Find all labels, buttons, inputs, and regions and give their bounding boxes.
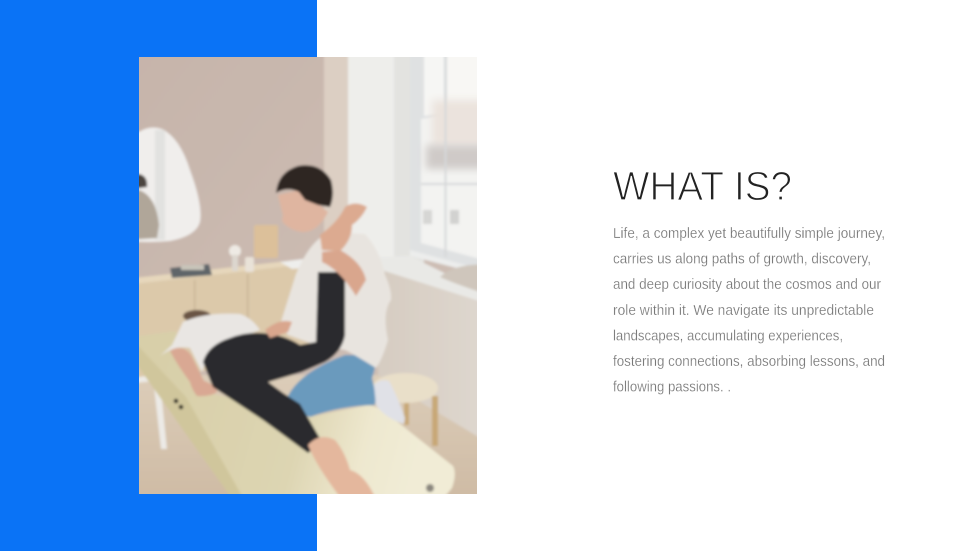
table hardware bbox=[426, 484, 434, 492]
body paragraph: role within it. We navigate its unpredictable bbox=[613, 303, 874, 319]
stool bbox=[372, 373, 438, 446]
window bbox=[410, 57, 477, 269]
body paragraph: following passions. . bbox=[613, 380, 731, 396]
massage table bbox=[170, 375, 456, 494]
body paragraph: and deep curiosity about the cosmos and our bbox=[613, 277, 881, 293]
wooden cabinet bbox=[139, 262, 308, 376]
heading: WHAT IS? bbox=[613, 163, 792, 209]
window sill and pillow bbox=[382, 262, 477, 301]
therapist's head bbox=[276, 165, 333, 232]
therapist's jeans bbox=[288, 355, 376, 417]
client's lower foot bbox=[306, 436, 374, 494]
body paragraph bbox=[613, 226, 885, 396]
body paragraph: fostering connections, absorbing lessons, and bbox=[613, 354, 885, 370]
photo: therapist stretching a client's leg on a massage table bbox=[139, 57, 477, 494]
table legs bbox=[139, 375, 168, 450]
wall mirror bbox=[139, 126, 202, 244]
blue background panel bbox=[0, 0, 317, 551]
therapist's sock bbox=[374, 380, 405, 424]
therapist's hands bbox=[265, 250, 366, 338]
body paragraph: landscapes, accumulating experiences, bbox=[613, 328, 843, 344]
client's raised foot bbox=[320, 204, 367, 251]
client's arm and hand bbox=[170, 348, 217, 396]
body paragraph: carries us along paths of growth, discovery, bbox=[613, 252, 871, 268]
body paragraph: Life, a complex yet beautifully simple journey, bbox=[613, 226, 885, 242]
client's black leggings bbox=[203, 272, 345, 453]
room background bbox=[139, 57, 477, 494]
client's head and shirt bbox=[160, 310, 260, 372]
objects on cabinet bbox=[170, 225, 303, 278]
therapist's shirt bbox=[280, 232, 391, 368]
